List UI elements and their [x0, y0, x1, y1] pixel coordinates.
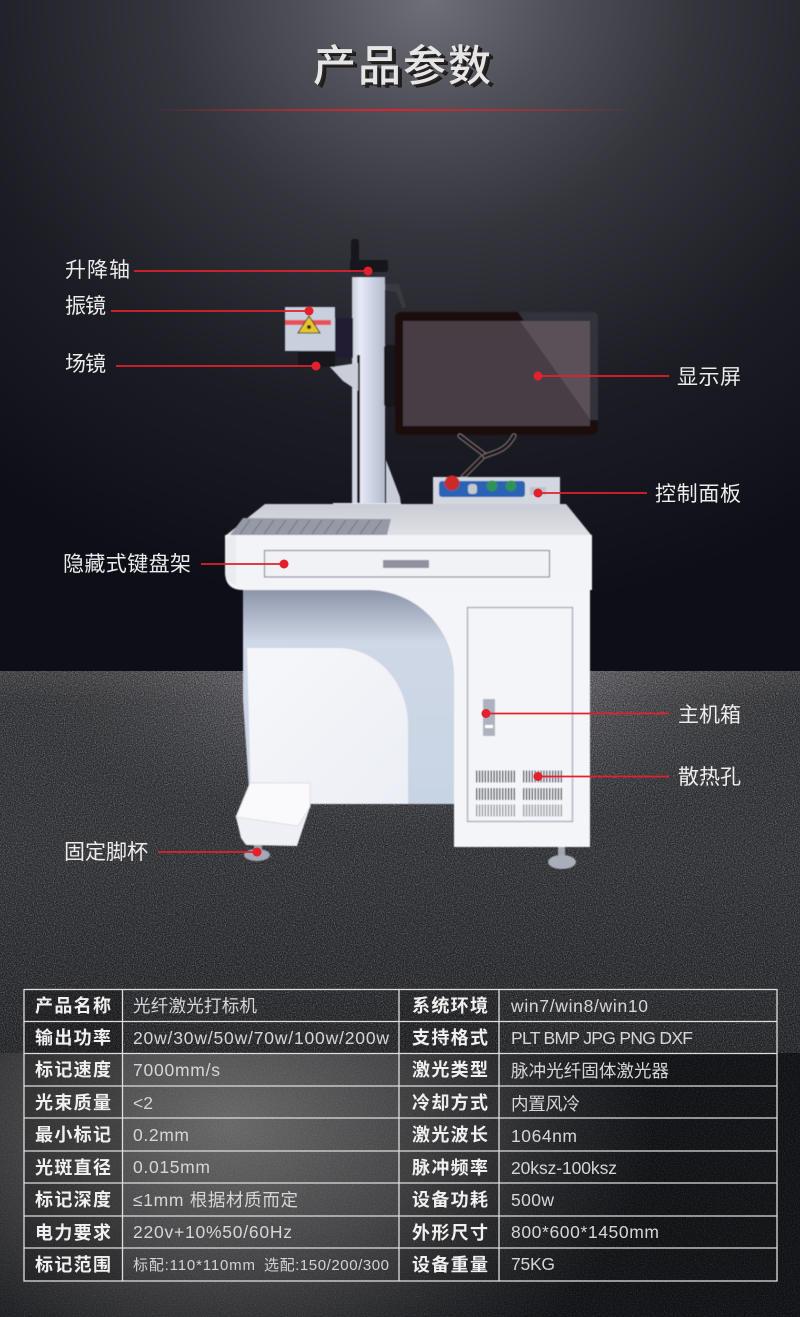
- field lens and bracket: [298, 352, 358, 391]
- row 8: 外形尺寸: [412, 1223, 488, 1243]
- callout: 散热孔: 散热孔: [678, 766, 741, 789]
- row 5: 1064nm: [511, 1126, 577, 1146]
- row 6: 光斑直径: [35, 1157, 111, 1178]
- row 5: 0.2mm: [133, 1125, 189, 1145]
- row 3: 标记速度: [35, 1060, 111, 1080]
- row 4: 冷却方式: [412, 1092, 488, 1113]
- callout: 控制面板: [534, 483, 741, 506]
- callout: 显示屏: 显示屏: [677, 366, 741, 389]
- row 9: [35, 1254, 555, 1275]
- cabinet door: [468, 608, 572, 822]
- callout: 隐藏式键盘架: 隐藏式键盘架: [63, 553, 191, 576]
- row 7: [35, 1190, 554, 1210]
- callout: 控制面板: 控制面板: [655, 483, 741, 506]
- title: 产品参数: [313, 32, 491, 94]
- callout: 散热孔: [534, 766, 741, 789]
- foot shelf: [236, 783, 310, 846]
- callout: 主机箱: 主机箱: [678, 704, 741, 727]
- row 7: ≤1mm 根据材质而定: [133, 1190, 298, 1210]
- row 4: 内置风冷: [511, 1094, 580, 1114]
- callout: 场镜: [65, 353, 320, 376]
- callout: 主机箱: [482, 704, 741, 727]
- title underline: [150, 109, 640, 111]
- galvo head: [285, 307, 353, 358]
- hidden drawer: [264, 550, 550, 577]
- machine: [225, 239, 598, 869]
- row 1: 光纤激光打标机: [133, 996, 258, 1016]
- row 1: 系统环境: [412, 995, 488, 1016]
- spec table: [24, 989, 777, 1281]
- row 9: 选配:150/200/300: [264, 1257, 389, 1274]
- row 7: 设备功耗: [412, 1190, 488, 1210]
- row 8: 电力要求: [35, 1223, 111, 1243]
- row 8: 800*600*1450mm: [511, 1222, 659, 1242]
- callout: 升降轴: 升降轴: [65, 259, 130, 282]
- row 6: 0.015mm: [133, 1157, 210, 1177]
- title: 产品参数: [317, 35, 495, 97]
- callout: 隐藏式键盘架: [63, 553, 288, 576]
- lifting column: [333, 239, 406, 514]
- row 9: 标记范围: [35, 1255, 111, 1275]
- callout: 升降轴: [65, 259, 372, 282]
- row 4: 光束质量: [35, 1092, 111, 1113]
- row 3: 激光类型: [412, 1060, 488, 1080]
- desk body: [225, 504, 592, 847]
- vents: [476, 776, 563, 810]
- row 5: [35, 1125, 577, 1146]
- row 3: 7000mm/s: [133, 1060, 220, 1080]
- row 1: [35, 995, 648, 1016]
- row 2: PLT BMP JPG PNG DXF: [511, 1028, 693, 1048]
- row 8: 220v+10%50/60Hz: [133, 1222, 292, 1242]
- row 5: 最小标记: [35, 1125, 111, 1145]
- row 2: 支持格式: [412, 1028, 488, 1048]
- row 1: 产品名称: [35, 996, 111, 1016]
- row 7: 500w: [511, 1190, 554, 1210]
- row 6: 20ksz-100ksz: [511, 1158, 617, 1178]
- callout: 固定脚杯: [64, 841, 262, 864]
- levelling feet: [244, 845, 576, 869]
- row 2: [35, 1027, 693, 1048]
- row 7: 标记深度: [35, 1190, 111, 1210]
- monitor: [384, 312, 598, 435]
- title: 产品参数: [315, 34, 493, 96]
- row 2: 输出功率: [35, 1027, 111, 1048]
- row 5: 激光波长: [412, 1125, 488, 1145]
- control panel: [433, 476, 560, 510]
- row 9: 75KG: [511, 1254, 555, 1274]
- row 2: 20w/30w/50w/70w/100w/200w: [133, 1028, 389, 1048]
- row 8: [35, 1222, 659, 1243]
- row 9: 设备重量: [412, 1255, 488, 1275]
- callout: 场镜: 场镜: [65, 353, 106, 376]
- row 6: 脉冲频率: [412, 1158, 488, 1178]
- callout: 显示屏: [534, 366, 741, 389]
- row 3: 脉冲光纤固体激光器: [511, 1061, 669, 1081]
- row 4: <2: [133, 1093, 153, 1113]
- row 1: win7/win8/win10: [510, 996, 648, 1016]
- row 3: [35, 1060, 669, 1081]
- monitor cables: [460, 436, 514, 477]
- callout: 固定脚杯: 固定脚杯: [64, 841, 148, 864]
- callout: 振镜: 振镜: [65, 295, 106, 318]
- keyboard tray: [230, 518, 391, 535]
- callout: 振镜: [65, 295, 314, 318]
- row 6: [35, 1157, 617, 1178]
- row 4: [35, 1092, 580, 1114]
- row 9: 标配:110*110mm: [133, 1257, 255, 1274]
